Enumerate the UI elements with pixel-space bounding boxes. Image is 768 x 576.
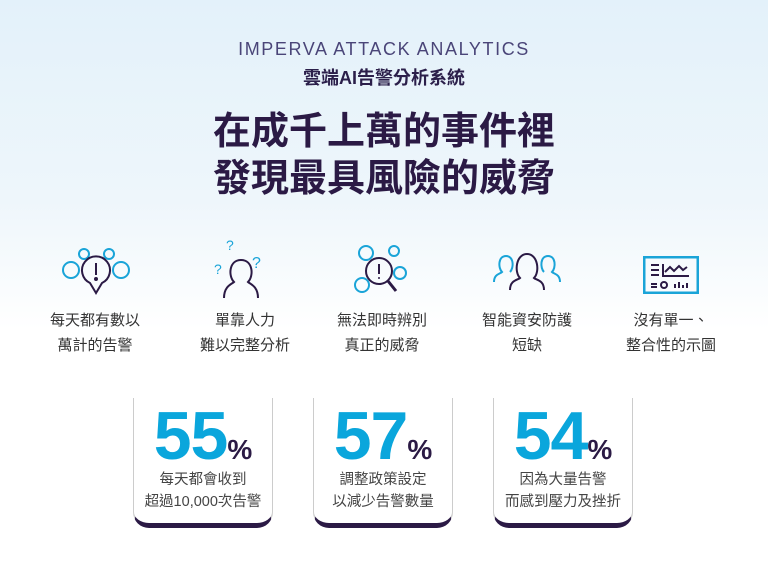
title [213, 111, 555, 200]
label 2: 難以完整分析 [200, 337, 290, 354]
card 57%: 57% [334, 398, 432, 474]
label 2: 單靠人力 [215, 312, 275, 329]
label 4: 短缺 [512, 337, 542, 354]
label 1: 每天都有數以 [50, 312, 140, 329]
card 57%: 調整政策設定 [340, 472, 426, 488]
label 3: 無法即時辨別 [337, 312, 427, 329]
title: 發現最具風險的威脅 [213, 158, 555, 200]
subtitle: 雲端AI告警分析系統 [303, 68, 465, 88]
label 2 [200, 312, 290, 354]
icon: magnifier [354, 245, 407, 293]
card 57%: 以減少告警數量 [332, 494, 434, 510]
label 5 [626, 312, 716, 354]
title: 在成千上萬的事件裡 [213, 111, 555, 153]
card 55% [133, 398, 273, 528]
icon: person question [214, 238, 261, 298]
label 3 [337, 312, 427, 354]
icon: people [493, 253, 561, 290]
label 5: 整合性的示圖 [626, 337, 716, 354]
label 1: 萬計的告警 [57, 337, 132, 354]
icon: alerts [62, 248, 130, 295]
card 55%: 55% [154, 398, 252, 474]
label 1 [50, 312, 140, 354]
label 5: 沒有單一、 [633, 312, 708, 329]
card 57% [313, 398, 453, 528]
card 54%: 因為大量告警 [520, 472, 606, 488]
card 55%: 每天都會收到 [160, 472, 246, 488]
icon: dashboard [643, 256, 699, 294]
card 54% [493, 398, 633, 528]
label 3: 真正的威脅 [344, 337, 420, 354]
label 4: 智能資安防護 [482, 312, 572, 329]
icon: person question: ? [214, 261, 222, 277]
label 4 [482, 312, 572, 354]
header: IMPERVA ATTACK ANALYTICS [238, 39, 530, 59]
card 54%: 而感到壓力及挫折 [505, 494, 621, 510]
icon: person question: ? [252, 255, 261, 272]
card 55%: 超過10,000次告警 [145, 494, 261, 510]
card 54%: 54% [514, 398, 612, 474]
